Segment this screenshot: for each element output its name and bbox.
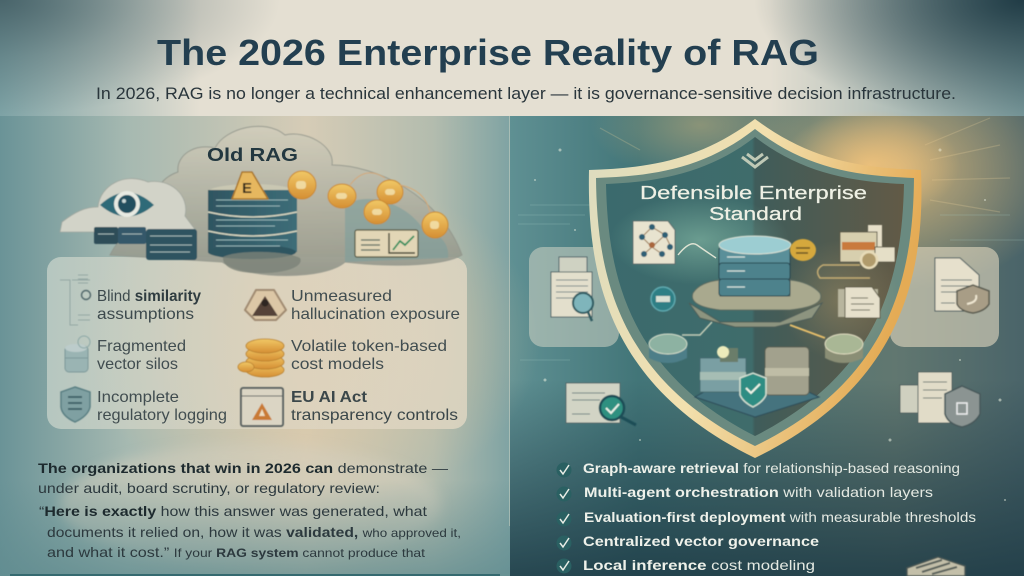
text: fragmented silos — [97, 338, 186, 373]
item: evaluation-first deployment: Evaluation-first deployment with measurable thresholds — [584, 509, 976, 525]
icon: folder with check — [566, 383, 636, 425]
icon: coins — [288, 171, 448, 238]
panel: old RAG problems — [47, 257, 467, 429]
icon: form document — [838, 287, 880, 318]
icon: eye cloud — [60, 179, 197, 232]
icon: blind similarity — [60, 275, 90, 325]
icon: chart card — [355, 230, 418, 257]
icon: logging shield — [61, 387, 90, 422]
icon: server silos — [94, 227, 197, 260]
icon: server block bottom right — [907, 557, 965, 576]
heading: Old RAG: Old RAG — [207, 145, 298, 165]
heading: Defensible Enterprise Standard: Standard — [709, 204, 802, 224]
icon: big cloud — [110, 126, 462, 276]
item: multi-agent orchestration: Multi-agent orchestration with validation layers — [584, 484, 933, 500]
heading: Defensible Enterprise Standard — [640, 183, 867, 224]
icon: central stacked database — [689, 236, 822, 327]
checklist: enterprise standard — [556, 460, 976, 574]
text: EU AI Act: transparency controls — [291, 407, 458, 424]
icon: round badge — [651, 287, 675, 311]
header band — [0, 0, 1024, 125]
icon: document with magnifier — [551, 257, 593, 321]
text: fragmented silos: vector silos — [97, 356, 178, 373]
icon: graph document — [633, 221, 675, 264]
title: The 2026 Enterprise Reality of RAG — [157, 32, 819, 73]
panel: left documents card — [529, 247, 619, 347]
icon: fragmented silos — [65, 336, 90, 372]
arrow: graph to database — [678, 244, 716, 258]
panel: right documents card — [890, 247, 999, 347]
icon: chat bubble — [790, 239, 816, 261]
illustration: old RAG clouds — [60, 126, 462, 276]
icon: hallucination warning — [245, 290, 286, 320]
icon: cloud base shadow — [223, 252, 301, 273]
icon: document with lock shield — [900, 372, 980, 427]
item: graph-aware retrieval: Graph-aware retrieval for relationship-based reasoning — [583, 460, 960, 476]
text block: audit statement: The organizations that win in 2026 can demonstrate — — [38, 460, 448, 476]
text: regulatory logging: Incomplete — [97, 389, 179, 406]
text: token cost models: cost models — [291, 356, 384, 373]
text: blind similarity: Blind similarity — [97, 288, 201, 305]
text: EU AI Act: EU AI Act — [291, 389, 368, 406]
icon: document with shield — [935, 258, 989, 313]
text block: audit statement: under audit, board scrutiny, or regulatory review: — [38, 480, 380, 496]
panel: defensible enterprise shield — [589, 110, 960, 458]
text block: audit statement: “Here is exactly how this answer was generated, what — [39, 503, 427, 519]
icon: teal swirl cloud — [345, 199, 448, 262]
text: blind similarity — [97, 288, 201, 323]
text: regulatory logging: regulatory logging — [97, 407, 227, 424]
text: fragmented silos: Fragmented — [97, 338, 186, 355]
item: centralized vector governance: Centralized vector governance — [583, 533, 819, 549]
icon: chevron — [742, 154, 768, 167]
heading: Defensible Enterprise Standard: Defensible Enterprise — [640, 183, 867, 203]
text block: audit statement — [38, 460, 461, 560]
icon: coin stack — [238, 339, 284, 377]
text: regulatory logging — [97, 389, 227, 424]
text block: audit statement: and what it cost.” If your RAG system cannot produce that — [47, 544, 426, 560]
icon: warning E: E — [242, 180, 252, 197]
text: blind similarity: assumptions — [97, 306, 194, 323]
icon: warning E — [232, 172, 268, 199]
icon: central database — [208, 184, 297, 259]
text: hallucination exposure: Unmeasured — [291, 288, 392, 305]
subtitle: In 2026, RAG is no longer a technical enhancement layer — it is governance-sensitive decision infrastructure. — [96, 84, 956, 103]
icon: stacked forms and gear — [818, 225, 895, 278]
text: token cost models: Volatile token-based — [291, 338, 447, 355]
text: EU AI Act — [291, 389, 458, 424]
icon: EU AI Act window — [241, 388, 283, 426]
icon: server stacks with check — [695, 346, 819, 417]
text: token cost models — [291, 338, 447, 373]
icon: olive disk — [790, 325, 863, 363]
text: hallucination exposure: hallucination exposure — [291, 306, 460, 323]
item: local inference cost modeling: Local inference cost modeling — [583, 557, 815, 573]
text block: audit statement: documents it relied on, how it was validated, who approved it, — [47, 524, 461, 540]
text: hallucination exposure — [291, 288, 460, 323]
icon: teal disk — [649, 322, 712, 363]
